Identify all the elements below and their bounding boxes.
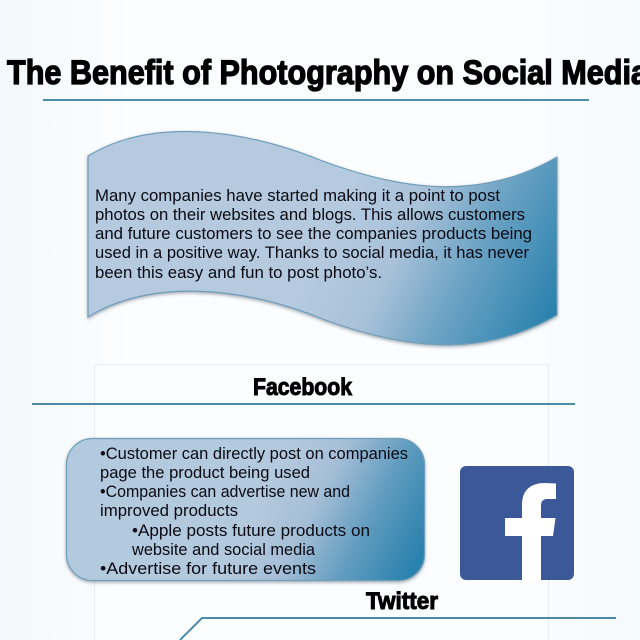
Facebook benefits text: website and social media: [131, 541, 316, 559]
Facebook benefits text: page the product being used: [100, 464, 310, 482]
intro text: used in a positive way. Thanks to social media, it has never: [95, 244, 530, 262]
Facebook benefits text: •Companies can advertise new and: [100, 483, 350, 501]
Facebook benefits text: •Apple posts future products on: [132, 522, 370, 540]
Facebook benefits text: improved products: [100, 502, 238, 520]
panel: Facebook benefits: [66, 438, 424, 580]
heading: Facebook: Facebook: [253, 374, 353, 401]
panel: intro wave banner: [88, 131, 557, 345]
panel: faint content frame: [94, 364, 548, 640]
connector line: Twitter: [180, 618, 616, 640]
intro text: photos on their websites and blogs. This allows customers: [95, 206, 525, 224]
intro text: been this easy and fun to post photo’s.: [95, 264, 382, 282]
heading: Twitter: Twitter: [366, 588, 438, 615]
icon: Facebook logo: [460, 466, 574, 580]
intro text: and future customers to see the companies products being: [95, 225, 532, 243]
intro text: Many companies have started making it a point to post: [95, 187, 500, 205]
Facebook benefits text: •Advertise for future events: [100, 560, 316, 578]
Facebook benefits text: •Customer can directly post on companies: [100, 445, 408, 463]
intro text: [95, 187, 532, 282]
Facebook benefits text: [100, 445, 408, 578]
